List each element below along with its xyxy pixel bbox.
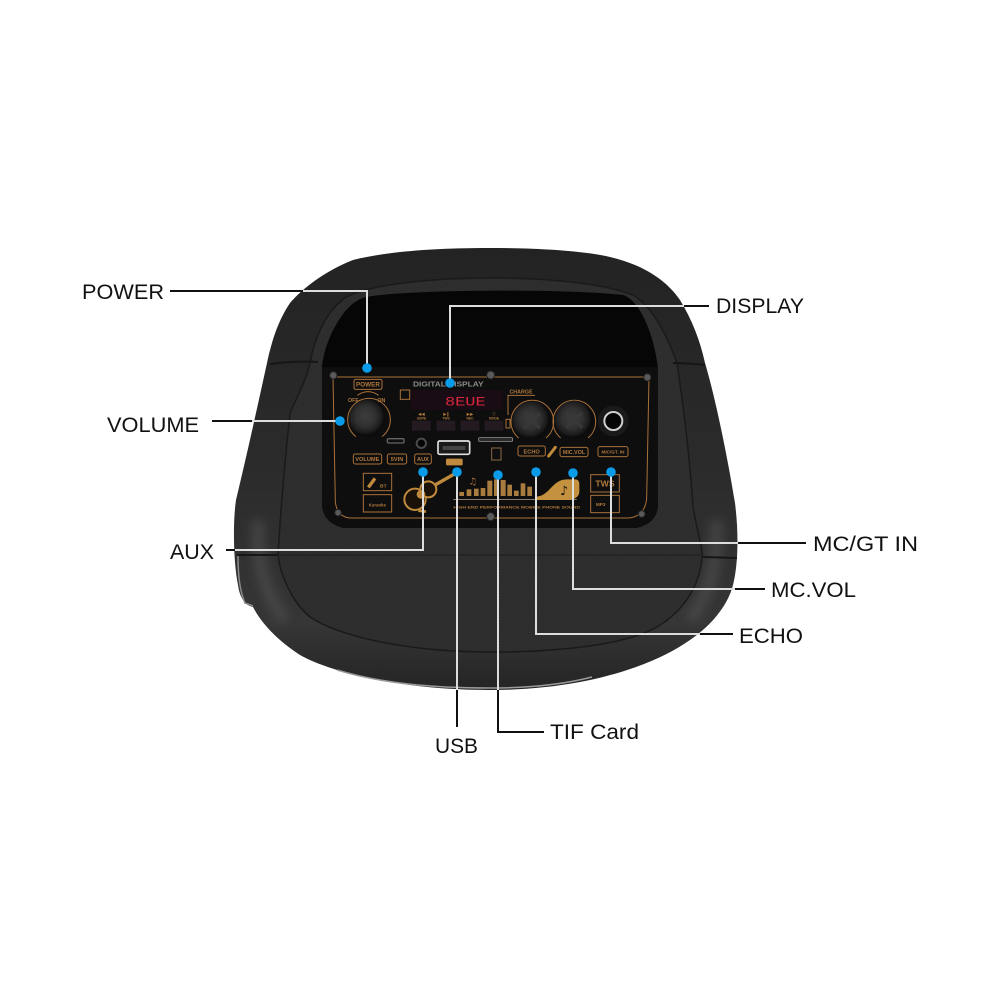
port labels: AUX <box>417 457 429 463</box>
callout: MC.VOL <box>568 468 856 602</box>
card icon <box>492 448 501 460</box>
tws and mp3 badges: TWS <box>595 479 615 489</box>
off on arc: OFF <box>348 398 359 404</box>
bt and karaoke badges: Karaoke <box>369 503 386 508</box>
port labels: MIC.VOL <box>563 450 586 456</box>
callout: AUX <box>170 467 428 564</box>
knob echo <box>511 400 554 440</box>
callout: POWER: POWER <box>82 281 164 304</box>
wave badge <box>535 479 579 500</box>
port labels: VOLUME <box>355 457 380 463</box>
bt and karaoke badges: BT <box>380 483 387 489</box>
gold border <box>333 377 649 518</box>
knob volume <box>348 398 390 437</box>
bottom highlight <box>337 670 592 688</box>
charge label <box>506 390 535 428</box>
guitar icon <box>404 473 457 512</box>
callout: USB <box>435 467 478 758</box>
callout: VOLUME: VOLUME <box>107 414 199 437</box>
transport buttons: MODE <box>489 417 500 421</box>
transport buttons: TWS <box>442 417 450 421</box>
transport buttons: ▶▶ <box>467 413 474 418</box>
grille seam <box>278 554 702 556</box>
microphone jack <box>598 406 629 436</box>
micro usb port <box>387 439 404 443</box>
transport buttons: ▽ <box>492 413 496 418</box>
knob mic vol <box>553 400 596 439</box>
aux port <box>417 439 426 448</box>
callout: TIF Card <box>493 470 639 744</box>
display screen: 8EUE <box>445 394 486 409</box>
callout: ECHO <box>531 467 803 648</box>
transport buttons <box>412 412 503 431</box>
callout: TIF Card: TIF Card <box>550 721 639 744</box>
callout: MC/GT IN: MC/GT IN <box>813 533 918 556</box>
control panel <box>322 367 658 528</box>
callout: AUX: AUX <box>170 541 214 564</box>
tws and mp3 badges <box>591 475 619 513</box>
callout: USB: USB <box>435 735 478 758</box>
transport buttons: REC <box>466 417 474 421</box>
port labels <box>353 446 628 465</box>
digital display heading: DIGITAL DISPLAY <box>413 382 484 389</box>
transport buttons: SUPB <box>417 417 427 421</box>
shell side highlights <box>258 520 716 620</box>
left notch <box>238 556 253 606</box>
panel plate <box>322 367 658 528</box>
callout: POWER <box>82 281 372 373</box>
off on arc <box>348 392 385 404</box>
shell seams <box>237 362 737 558</box>
callout: ECHO: ECHO <box>739 625 803 648</box>
callout: DISPLAY: DISPLAY <box>716 295 804 318</box>
outer shell <box>234 248 737 690</box>
slogan: HIGH END PERFORMANCE MOBILE PHONE SOUND <box>453 505 580 510</box>
bt and karaoke badges <box>363 473 392 512</box>
music notes: ♫ <box>468 477 477 488</box>
port labels: MIC/GT. IN <box>601 450 625 455</box>
fabric rim and grille <box>278 278 702 652</box>
screws <box>330 371 651 521</box>
top opening <box>322 291 658 368</box>
display screen <box>411 390 503 410</box>
port labels: ECHO <box>523 449 540 455</box>
callout: MC/GT IN <box>606 467 918 556</box>
note in badge: ♪ <box>560 483 568 498</box>
small display icon <box>400 390 410 399</box>
transport buttons: ▶‖ <box>443 412 449 418</box>
card slot <box>479 438 513 441</box>
usb port <box>438 441 470 454</box>
off on arc: ON <box>377 398 385 404</box>
port labels: 5VIN <box>391 457 403 463</box>
microphone icon <box>549 447 555 456</box>
charge label: CHARGE <box>509 390 533 396</box>
equalizer bars <box>453 479 577 500</box>
tws and mp3 badges: MP3 <box>596 502 606 507</box>
callout: VOLUME <box>107 414 345 437</box>
transport buttons: ◀◀ <box>418 413 425 418</box>
power label <box>354 379 382 389</box>
power label: POWER <box>356 382 380 389</box>
callout: DISPLAY <box>445 295 804 388</box>
callout: MC.VOL: MC.VOL <box>771 579 856 602</box>
speaker body <box>234 248 737 690</box>
